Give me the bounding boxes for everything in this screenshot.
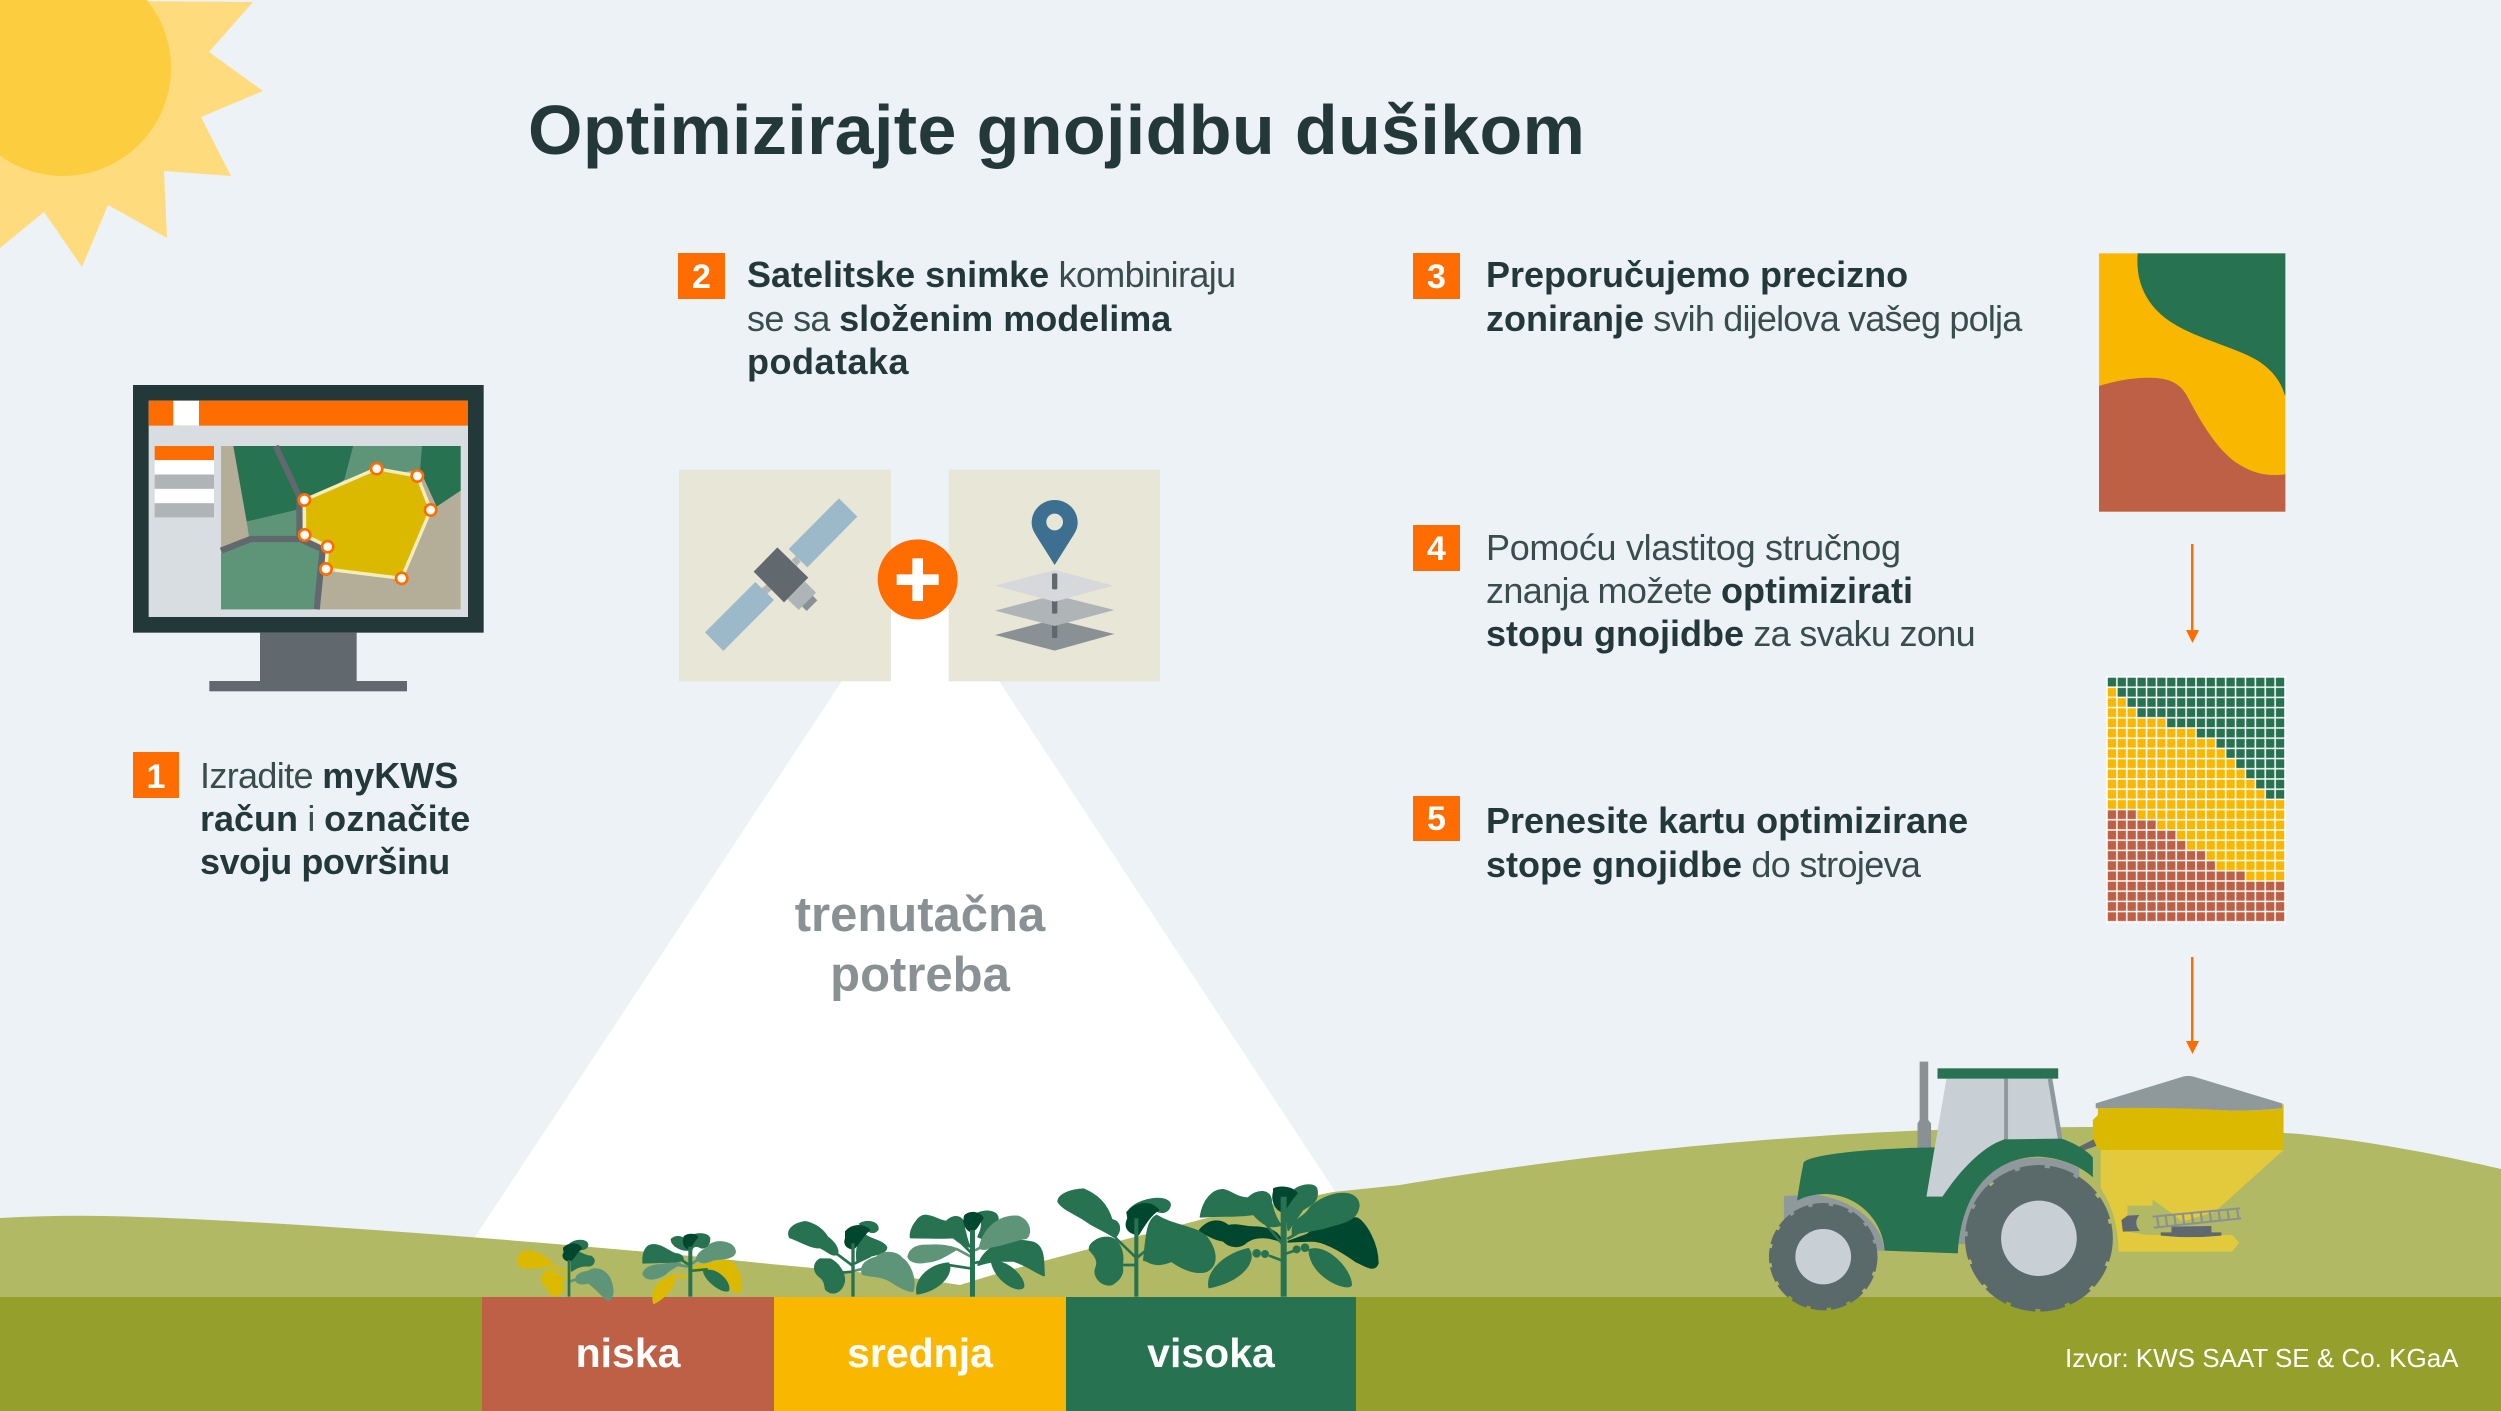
step 5 text: stope gnojidbe [1486,844,1742,885]
mudguards [1784,1194,1885,1251]
step 4 number: 4 [1427,530,1446,568]
step 1 text: myKWS [322,755,458,796]
monitor [133,385,484,691]
light beam [440,560,1400,1290]
source note: Izvor: KWS SAAT SE & Co. KGaA [2065,1343,2459,1373]
rear wheel [1967,1167,2111,1310]
step 4 number [1413,525,1460,571]
icon: sun [0,0,263,267]
step 5 text: do strojeva [1742,844,1922,885]
step 1 number: 1 [147,758,165,796]
step 1 text: Izradite [200,755,322,796]
rating bars: niska [576,1330,682,1376]
plant 2 [643,1234,740,1303]
arrow: grid to spreader [2186,957,2199,1054]
step 2 number [678,253,725,299]
exhaust [1917,1062,1931,1148]
step 4 text: stopu gnojidbe [1486,613,1744,654]
plant 5 [1058,1189,1215,1297]
step 2 text: Satelitske snimke [747,254,1049,295]
plant 4 [908,1212,1044,1297]
step 3 number [1413,253,1460,299]
hills [0,1127,2501,1411]
arrow: zone map to grid [2186,544,2199,643]
cab [1926,1068,2063,1197]
step 3 text: svih dijelova vašeg polja [1644,298,2023,339]
plant 6 [1200,1185,1378,1297]
step 1 number [133,752,179,798]
step 1 text: svoju površinu [200,841,450,882]
rating bars: visoka [1147,1330,1276,1376]
satellite and data layers panels [679,470,1160,681]
zone map [2099,253,2285,512]
step 5 number [1413,796,1460,841]
step 2 text: kombiniraju [1049,254,1235,295]
tractor body [1797,1139,2093,1253]
tractor with spreader [1771,1062,2284,1310]
rating bars [482,1297,1356,1411]
panel: satellite [679,470,891,681]
step 3 text: Preporučujemo precizno [1486,254,1908,295]
step 2 number: 2 [692,258,711,296]
plants: high [1058,1185,1378,1297]
rating bars: srednja [847,1330,994,1376]
front wheel [1771,1205,1876,1309]
step 2 text: podataka [747,341,910,382]
step 1 text: račun [200,798,298,839]
plants: low [518,1234,740,1303]
grid map [2106,676,2286,924]
beam label: potreba [830,948,1011,1002]
step 3 text: zoniranje [1486,298,1644,339]
step 4 text: optimizirati [1721,570,1913,611]
spreader hopper [2079,1076,2284,1252]
step 4 text: za svaku zonu [1744,613,1975,654]
plant 3 [789,1222,914,1297]
panel: location data layers [949,470,1160,681]
plant 1 [518,1241,612,1300]
step 5 text: Prenesite kartu optimizirane [1486,800,1968,841]
step 2 text: se sa [747,298,839,339]
title: Optimizirajte gnojidbu dušikom [528,91,1585,169]
step 3 number: 3 [1427,258,1446,296]
plants: medium [789,1212,1044,1297]
step 2 text: složenim modelima [839,298,1172,339]
step 4 text: Pomoću vlastitog stručnog [1486,527,1901,568]
step 1 text: i označite [307,798,471,839]
step 5 number: 5 [1427,800,1446,838]
step 4 text: znanja možete [1486,570,1721,611]
beam label: trenutačna [795,888,1046,942]
icon: plus [878,539,958,619]
